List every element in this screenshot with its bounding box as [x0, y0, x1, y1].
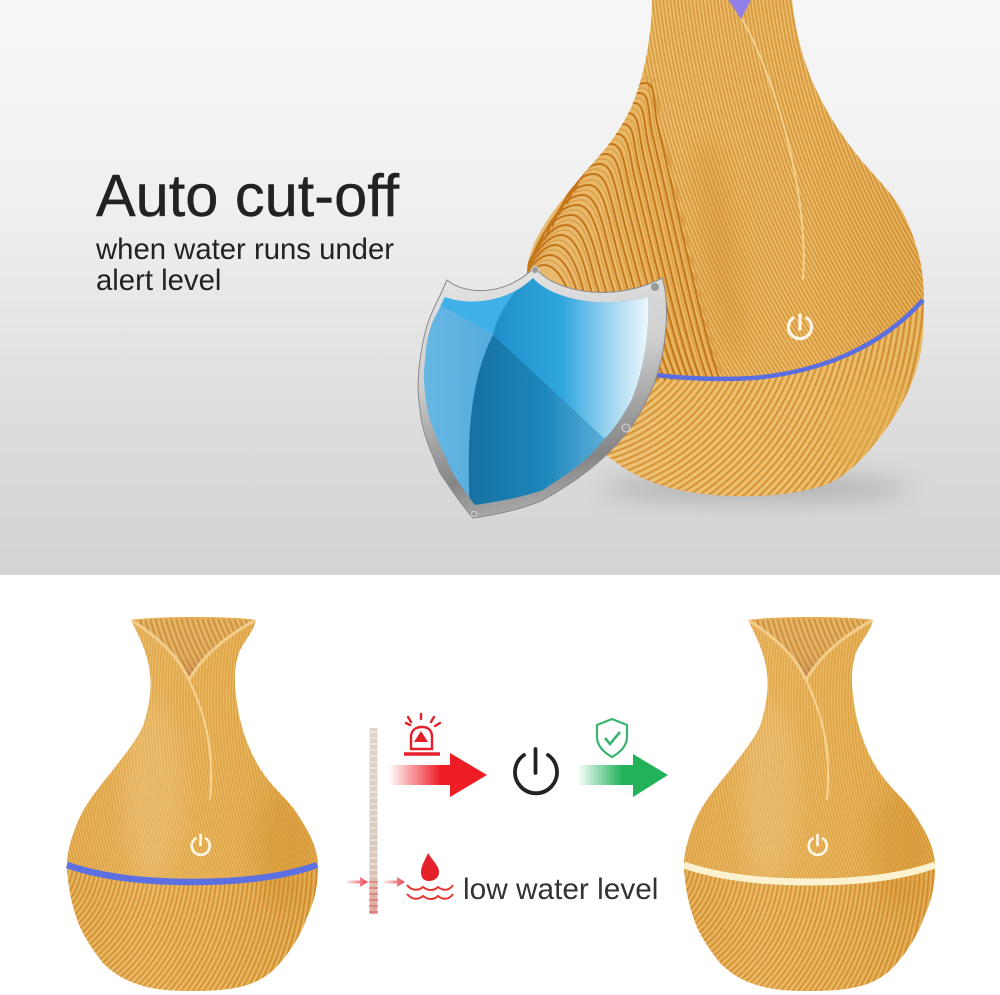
arrow: ruler pointer right: [384, 877, 405, 887]
low water level label: low water level: [463, 873, 658, 906]
icon: right warm light band: [684, 865, 935, 882]
icon: left blue light band: [67, 865, 317, 882]
icon: blue light band: [655, 300, 923, 379]
arrow: red: [390, 753, 487, 797]
icon: green check shield: [597, 719, 627, 757]
title: Auto cut-off: [96, 162, 400, 229]
icon: shield: [418, 266, 666, 518]
arrow: ruler pointer left: [347, 877, 368, 887]
shield blue faces: [420, 270, 655, 510]
icon: touch power button: [788, 315, 812, 339]
shield rivets: [472, 266, 660, 516]
panel: top background: [0, 0, 1000, 575]
icon: low water drop and waves: [407, 853, 453, 899]
arrow: green: [578, 754, 668, 797]
subtitle text block: alert level: [96, 264, 221, 297]
icon: alarm light: [404, 714, 440, 754]
shield metal frame: [418, 267, 666, 518]
water level ruler: [369, 728, 378, 914]
big wooden diffuser: [500, 0, 935, 500]
subtitle text block: when water runs under: [95, 233, 394, 266]
vase shadow: [600, 476, 910, 500]
icon: power symbol: [515, 749, 557, 793]
left wooden diffuser: [53, 610, 333, 995]
right wooden diffuser: [670, 610, 950, 995]
